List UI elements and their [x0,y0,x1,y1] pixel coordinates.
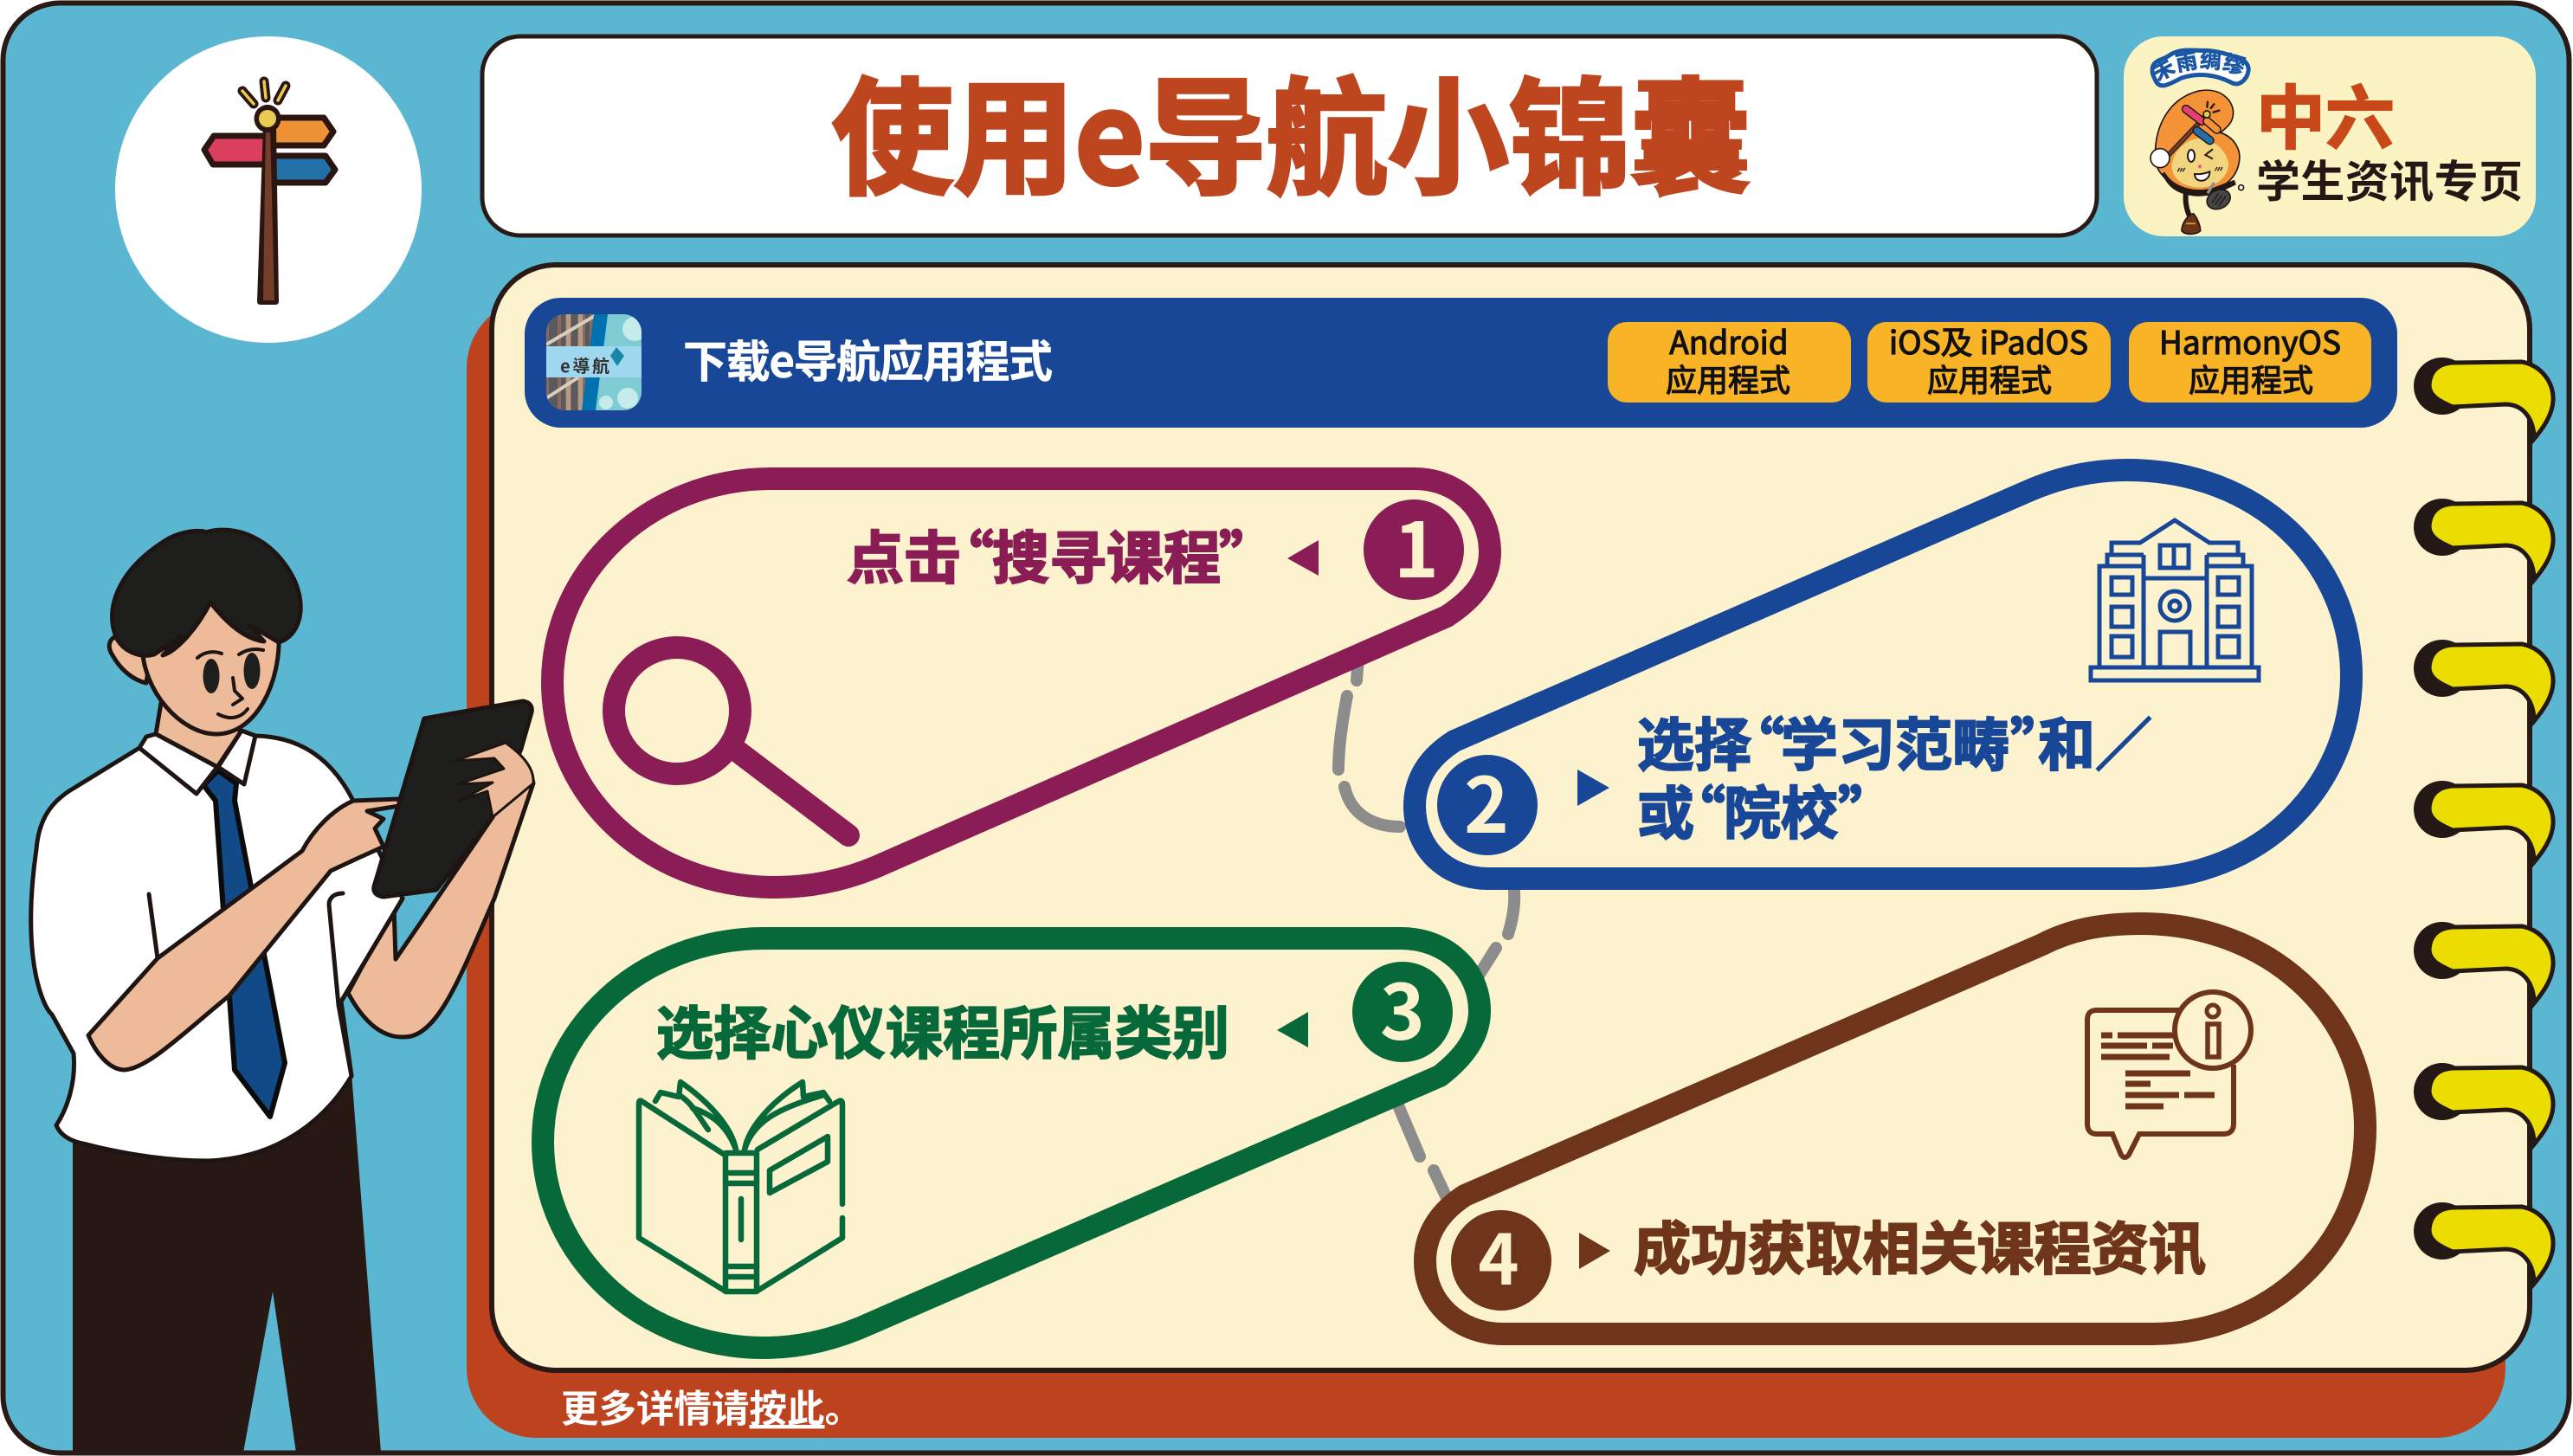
mascot with badge [2150,48,2251,235]
title box [482,36,2097,235]
logo text: 学生资讯专页 [2256,146,2523,210]
button: iOS及iPadOS: iOS及 iPadOS [1889,317,2088,364]
collar [139,731,255,794]
icon: building [2091,520,2259,680]
red backing panel [467,299,2505,1438]
step 3 text: 选择心仪课程所属类别 [656,988,1229,1071]
hand on tablet [455,743,533,817]
step 4 number [1451,1205,1551,1311]
step 1 number [1364,490,1464,600]
icon: e导航 app [546,314,647,410]
notebook panel [492,265,2530,1370]
button: iOS及iPadOS [1867,317,2111,403]
face [142,597,279,734]
ear [109,636,152,683]
step 2 arrow [1577,770,1609,806]
step 2 text [1637,699,2152,851]
step 3 arrow [1277,1012,1308,1047]
neck [156,703,242,767]
step 2 text: 或“院校” [1637,768,1895,851]
step 2 number [1437,745,1538,855]
binder rings [2414,358,2553,1296]
shirt details [149,893,403,1076]
step 4 number: 4 [1478,1205,1519,1305]
button: HarmonyOS: 应用程式 [2189,356,2313,401]
button: HarmonyOS [2129,317,2371,403]
hair [113,530,300,655]
step 3 number [1352,952,1453,1062]
icon: magnifier [614,647,848,835]
logo text: 中六 [2256,63,2395,164]
step 1 number: 1 [1394,490,1439,600]
button: Android: 应用程式 [1666,356,1790,401]
step 1 [552,479,1490,887]
trousers [73,1073,381,1453]
step 2 number: 2 [1464,745,1509,855]
bar heading: 下载e导航应用程式 [683,326,1053,390]
button: iOS及iPadOS: 应用程式 [1927,356,2052,401]
logo text [2256,63,2523,210]
person with tablet [31,530,533,1453]
button: HarmonyOS: HarmonyOS [2159,317,2341,364]
eyes [203,659,220,693]
tie [203,770,285,1117]
step 4 arrow [1579,1233,1610,1269]
icon: signpost in white circle [115,36,422,343]
pointing arm [88,799,399,1070]
step 2 [1415,470,2351,879]
far arm [348,743,533,1037]
step 3 [543,938,1480,1348]
title text: 使用e导航小锦囊 [832,38,1751,221]
tablet [374,701,532,897]
step 2 text: 选择“学习范畴”和／ [1637,699,2152,783]
icon: e导航 app: e導航 [560,352,609,377]
facial features [197,649,263,718]
button: Android [1608,317,1851,403]
step 4 text: 成功获取相关课程资讯 [1634,1203,2206,1286]
step 3 number: 3 [1380,952,1425,1062]
dashed connectors [1338,658,1514,1202]
icon: info bubble [2087,992,2251,1157]
mascot with badge: 未雨绸缪 [2154,52,2247,81]
button: Android: Android [1669,317,1789,364]
icon: open book [639,1082,842,1292]
step 1 text: 点击“搜寻课程” [847,512,1276,596]
logo panel: 中六学生资讯专页 [2124,36,2536,236]
step 1 arrow [1287,540,1319,576]
download bar [525,298,2397,428]
footer link text: 更多详情请按此。 [561,1379,862,1433]
shirt [31,736,403,1161]
step 4 [1425,924,2365,1334]
